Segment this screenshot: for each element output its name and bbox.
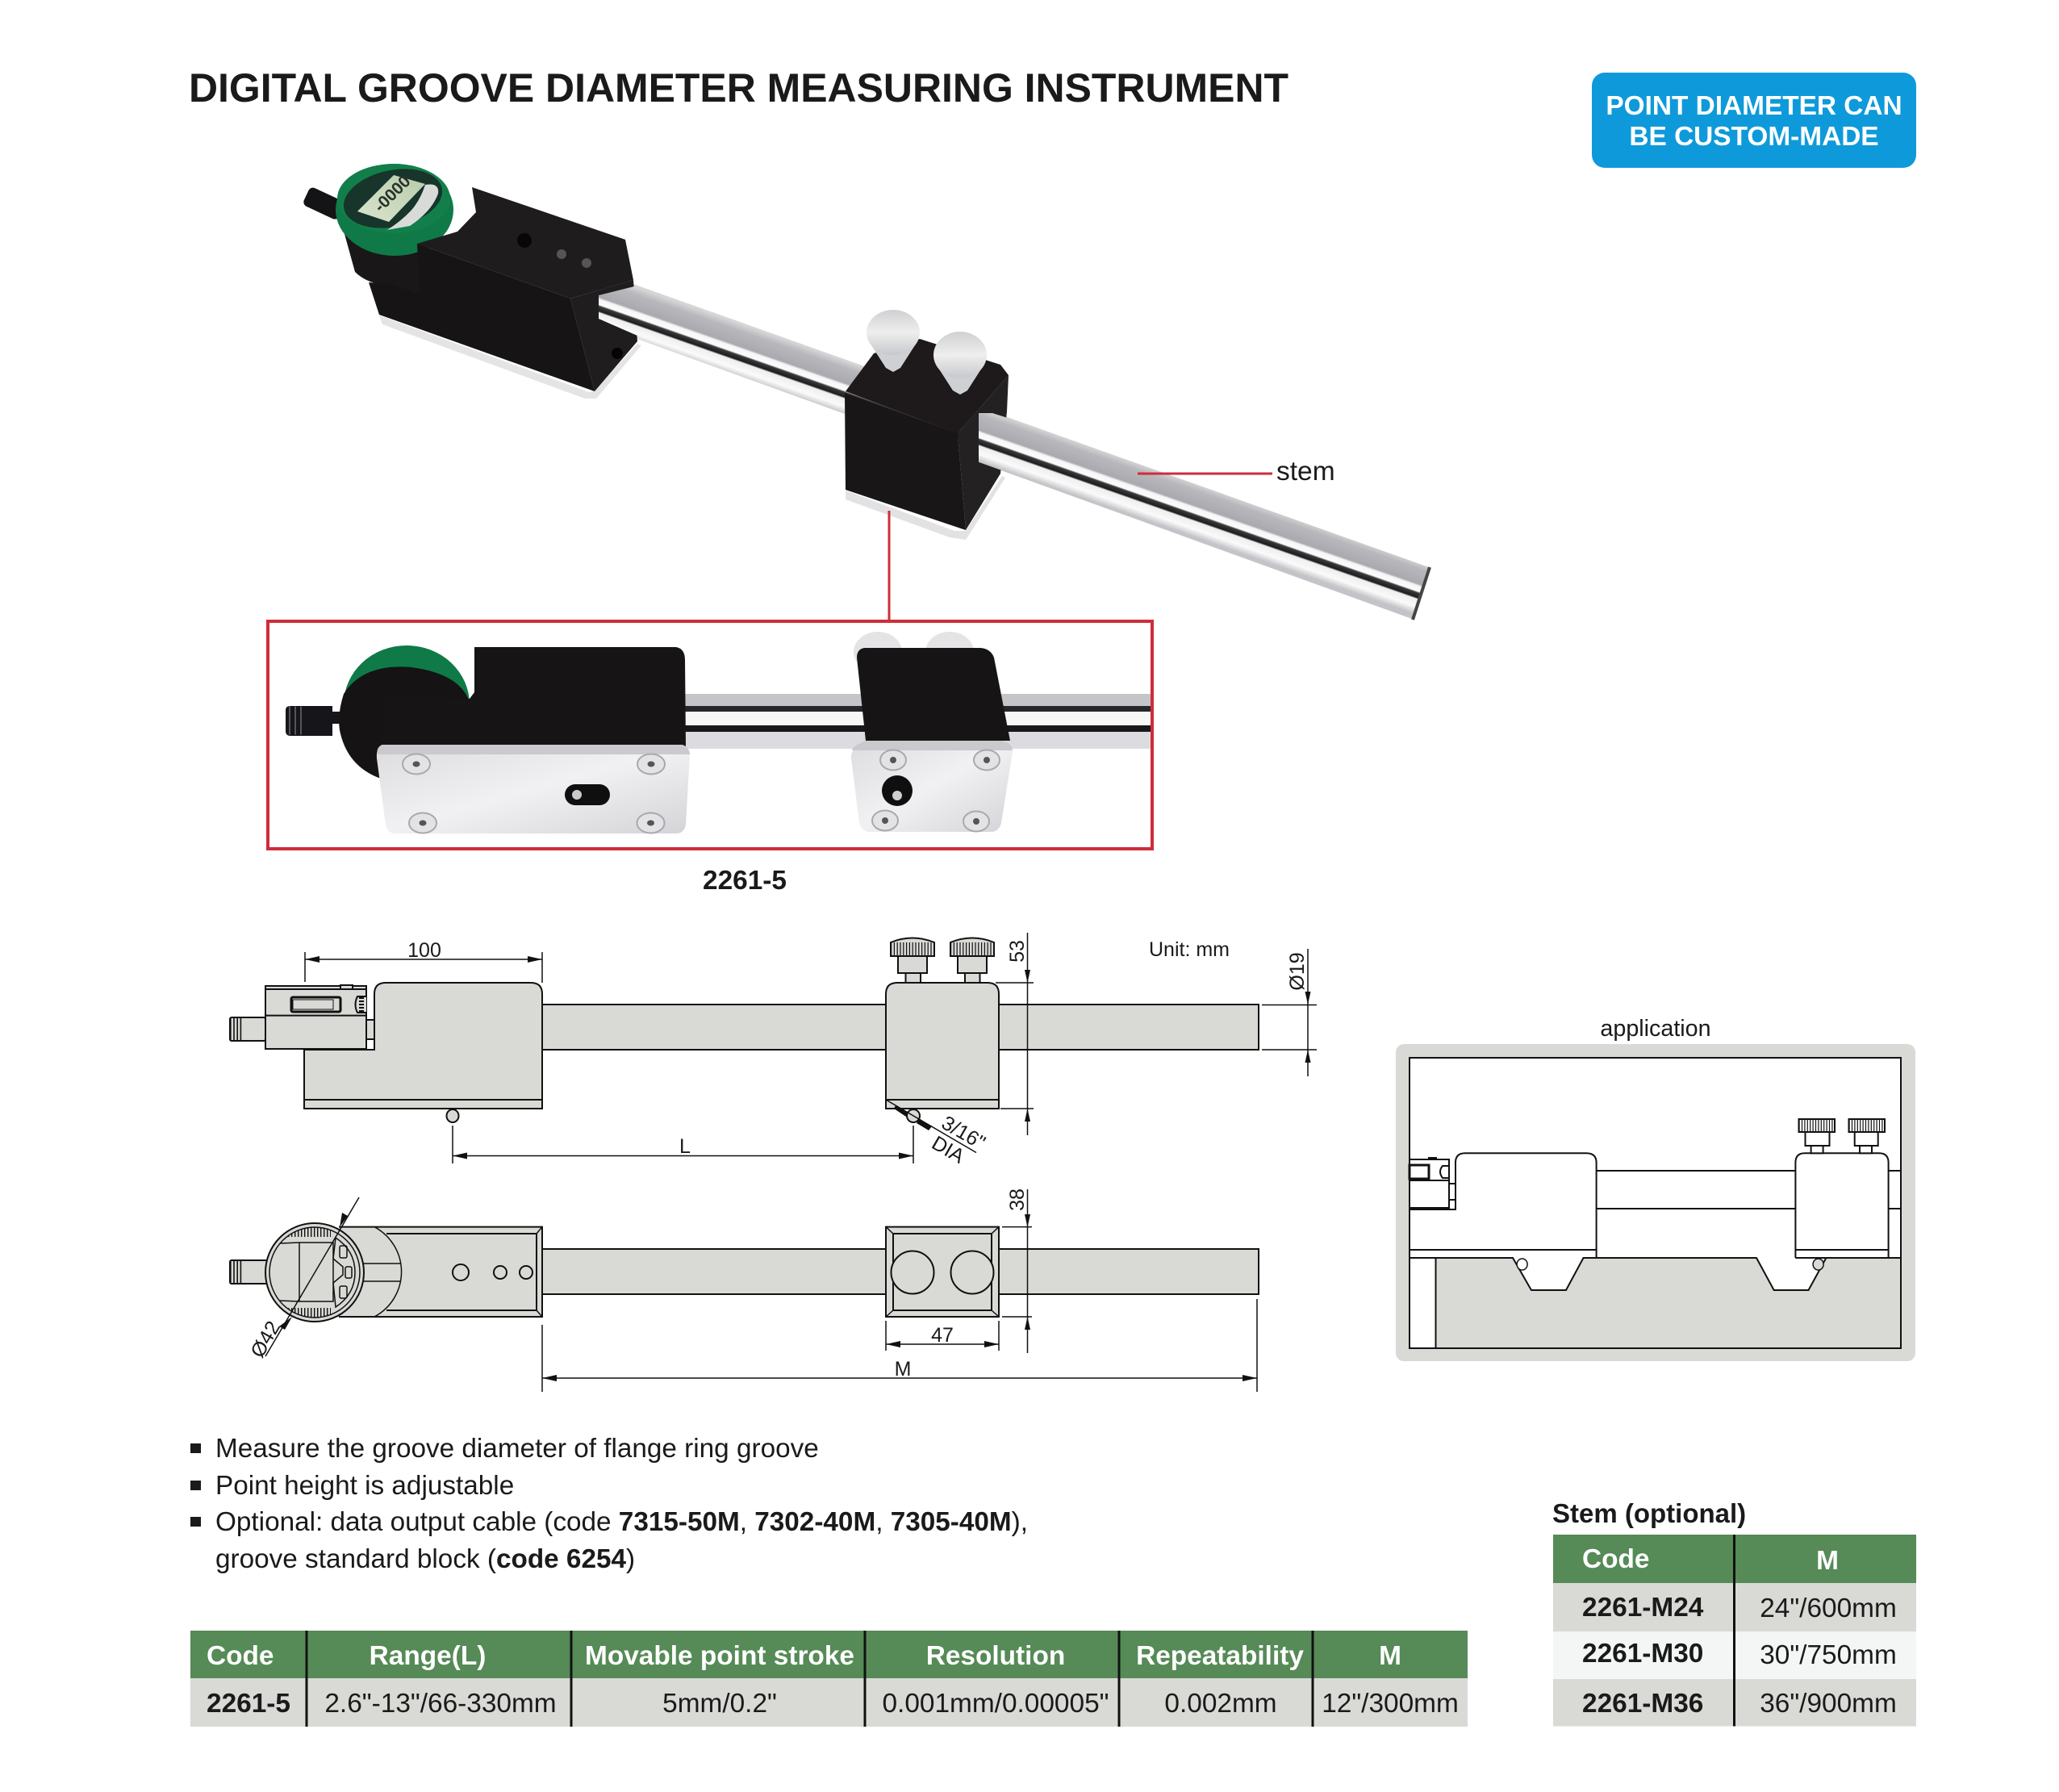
callout: point diameter custom-made badge: BE CUSTOM-MADE [1629,122,1879,152]
unit note: Unit: mm [1149,938,1230,961]
bullet 3 [190,1507,1028,1574]
table header row: Resolution [926,1641,1065,1671]
stem table rows: 2261-M24 [1582,1593,1704,1623]
icon: dial face [230,1223,364,1322]
model code caption: 2261-5 [703,866,787,896]
table data row: 0.002mm [1164,1689,1277,1719]
stem [542,1005,1259,1050]
table header row: M [1379,1641,1401,1671]
heading: application: application [1600,1016,1711,1042]
dimension 53: 53 [1006,940,1029,963]
connector line to inset [888,511,891,621]
callout: stem leader: stem [1276,457,1335,487]
stem optional table [1552,1498,1916,1727]
icon: main block steel plate [377,745,690,833]
sliding ball point [907,1109,920,1122]
table header row: Movable point stroke [585,1641,854,1671]
technical drawing: top view [230,1188,1259,1392]
stem table rows [1582,1593,1897,1719]
workpiece with grooves [1436,1258,1901,1348]
heading: stem optional: Stem (optional) [1552,1498,1746,1528]
dimension L: L [679,1135,691,1158]
bullet 3: Optional: data output cable (code 7315-50M, 7302-40M, 7305-40M), [215,1507,1028,1537]
dimension 47: 47 [931,1324,954,1347]
sliding block [886,983,999,1109]
table data row [207,1689,1459,1719]
icon: application knob left [1799,1119,1835,1153]
dimension diameter 42: Ø42 [246,1318,285,1361]
icon: main black body [369,187,678,399]
callout: point diameter custom-made badge: POINT DIAMETER CAN [1606,91,1902,121]
dimension 38 [1002,1188,1032,1353]
feature list [190,1434,1028,1574]
dimension 3/16 DIA: DIA [928,1132,968,1168]
dimension M: M [895,1358,911,1381]
bullet 3: groove standard block (code 6254) [215,1544,635,1574]
icon: knurled knob right [950,938,994,983]
product photo: instrument in perspective [302,161,1430,620]
callout: point diameter custom-made badge [1592,73,1916,168]
table data row: 2261-5 [207,1689,290,1719]
icon: application knob right [1849,1119,1885,1153]
icon: thumb screws [867,310,987,395]
bullet 2: Point height is adjustable [215,1471,514,1501]
dimension 38: 38 [1006,1188,1029,1211]
bullet 1: Measure the groove diameter of flange ring groove [215,1434,819,1464]
stem table rows: 2261-M36 [1582,1689,1703,1719]
icon: chrome stem [597,271,1430,620]
table header row: Repeatability [1136,1641,1304,1671]
icon: slide block black [857,648,1010,741]
stem table rows: 2261-M30 [1582,1639,1703,1669]
stem table rows: 24"/600mm [1760,1594,1897,1623]
table header row: Range(L) [370,1641,486,1671]
table header row: Code [207,1641,274,1671]
table header row [207,1641,1401,1671]
dial side [230,985,366,1049]
dimension diameter 19 [1262,949,1317,1076]
table data row: 5mm/0.2" [662,1689,777,1719]
spec table [190,1631,1468,1727]
title: DIGITAL GROOVE DIAMETER MEASURING INSTRUMENT [189,65,1288,111]
ball point [447,1109,458,1122]
technical drawing: side view [230,933,1317,1168]
icon: digital indicator [302,161,453,297]
stem table header: M [1816,1546,1839,1576]
sliding block top [886,1227,999,1317]
icon: chrome stem in inset [685,694,1151,749]
table data row: 12"/300mm [1322,1689,1459,1719]
table data row: 0.001mm/0.00005" [882,1689,1109,1719]
stem table rows: 36"/900mm [1760,1689,1897,1719]
dimension 3/16 DIA: 3/16" [938,1112,989,1155]
table data row: 2.6"-13"/66-330mm [324,1689,557,1719]
icon: slide block steel plate [851,741,1013,832]
dimension diameter 19: Ø19 [1286,952,1309,991]
panel: application [1396,1016,1915,1361]
icon: sliding black block [845,339,1017,540]
stem table header [1582,1544,1839,1576]
stem table rows: 30"/750mm [1760,1640,1897,1670]
inset panel: underside view [268,511,1152,849]
icon: knurled knob left [891,938,934,983]
instrument outline [1410,1153,1901,1270]
main block [304,983,542,1109]
main body [339,1227,542,1317]
icon: digital indicator: -0000 [370,172,415,216]
dimension 47 [886,1321,999,1351]
dimension 53 [996,933,1034,1135]
icon: main block black [383,647,686,746]
stem table header: Code [1582,1544,1649,1574]
icon: indicator in inset [286,645,470,779]
icon: screws behind slide block [854,632,974,672]
dimension 3/16 DIA [886,1100,989,1168]
stem [542,1249,1259,1294]
dimension diameter 42 [246,1197,359,1361]
dimension 100: 100 [407,939,441,962]
